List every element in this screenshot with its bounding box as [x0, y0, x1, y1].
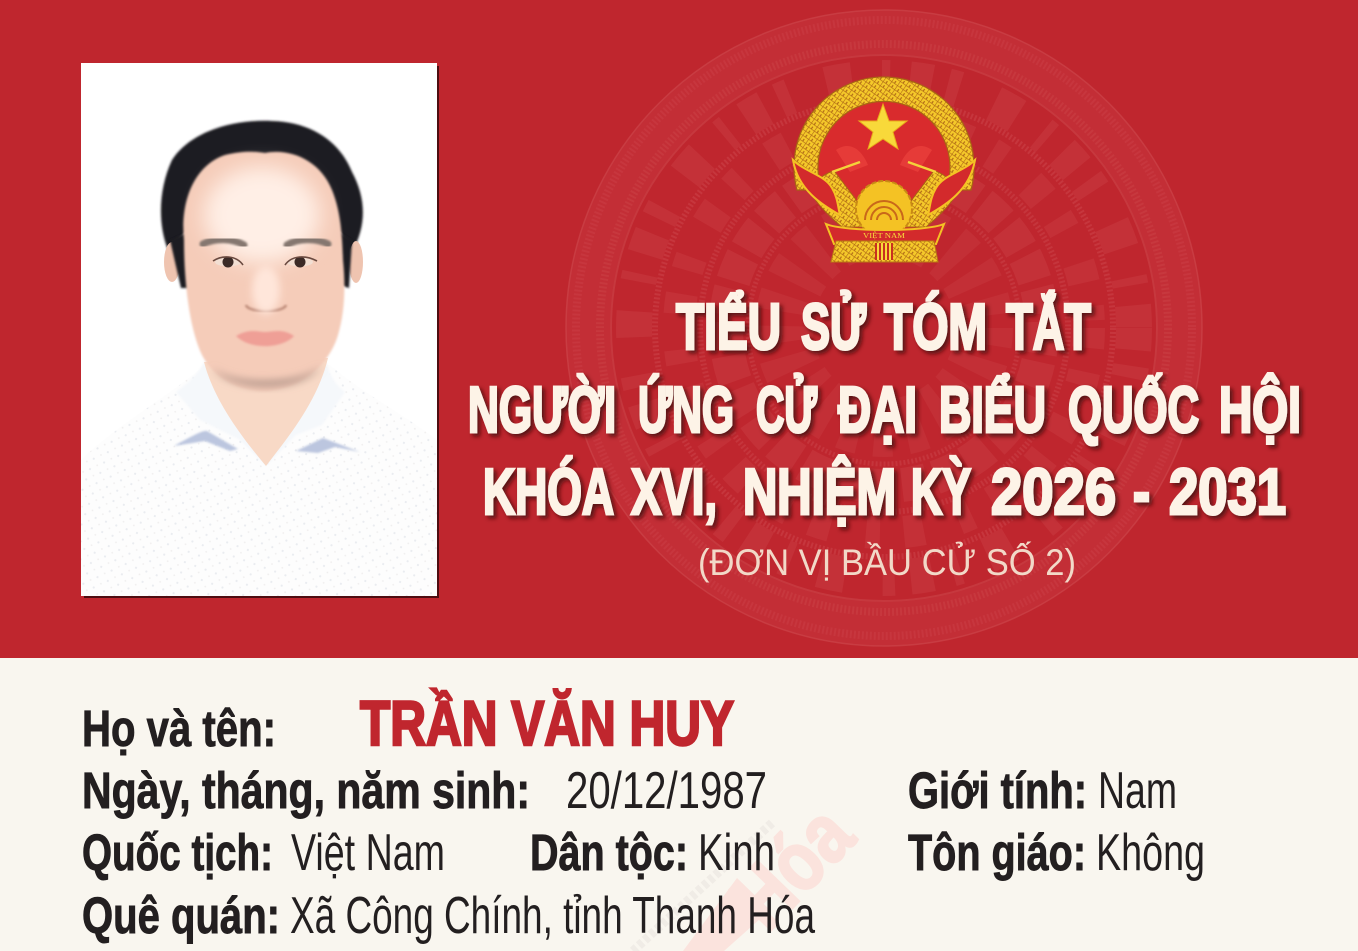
field: hometown: Xã Công Chính, tỉnh Thanh Hóa [290, 887, 815, 945]
field: date of birth: 20/12/1987 [566, 762, 767, 820]
field: nationality [82, 824, 445, 882]
title: 2026 [991, 455, 1116, 528]
field: hometown: Quê quán: [82, 887, 280, 944]
title [468, 290, 1301, 528]
field: religion: Không [1096, 824, 1205, 882]
icon: national emblem [793, 77, 975, 262]
title: NHIỆM [743, 455, 896, 528]
field: ethnicity: Kinh [698, 824, 775, 882]
subtitle: (ĐƠN VỊ BẦU CỬ SỐ 2) [698, 541, 1076, 583]
panel: red header background [0, 0, 1358, 658]
watermark: Hóa [713, 786, 872, 946]
field: hometown [82, 887, 815, 945]
field: ethnicity: Dân tộc: [530, 824, 688, 881]
icon: national emblem: VIỆT NAM [863, 232, 906, 240]
field: nationality: Việt Nam [291, 824, 445, 882]
title: 2031 [1169, 455, 1286, 528]
title: SỬ [801, 290, 866, 363]
field: nationality: Quốc tịch: [82, 824, 273, 881]
title: - [1133, 455, 1150, 528]
title: TIỂU [676, 290, 781, 363]
title: XVI, [631, 455, 717, 528]
title: CỬ [756, 373, 817, 446]
photo: portrait of the candidate [81, 63, 439, 598]
field: date of birth: Ngày, tháng, năm sinh: [82, 762, 530, 819]
field: full name: Họ và tên: [82, 700, 276, 757]
field: full name: TRẦN VĂN HUY [360, 688, 734, 759]
title: TÓM [884, 290, 987, 363]
title: KHÓA [483, 455, 614, 528]
title: KỲ [911, 455, 971, 528]
field: full name [82, 688, 734, 759]
title: ĐẠI [838, 373, 917, 446]
title: TẮT [1006, 290, 1091, 363]
title: QUỐC [1068, 373, 1199, 446]
decorative bronze drum watermark [566, 10, 1202, 646]
field: religion: Tôn giáo: [908, 824, 1086, 881]
panel: candidate details [0, 658, 1358, 951]
field: gender: Nam [1098, 762, 1177, 820]
title: ỨNG [638, 373, 734, 446]
title: NGƯỜI [468, 373, 616, 446]
title: HỘI [1219, 373, 1301, 446]
field: gender: Giới tính: [908, 762, 1087, 819]
title: BIỂU [939, 373, 1046, 446]
